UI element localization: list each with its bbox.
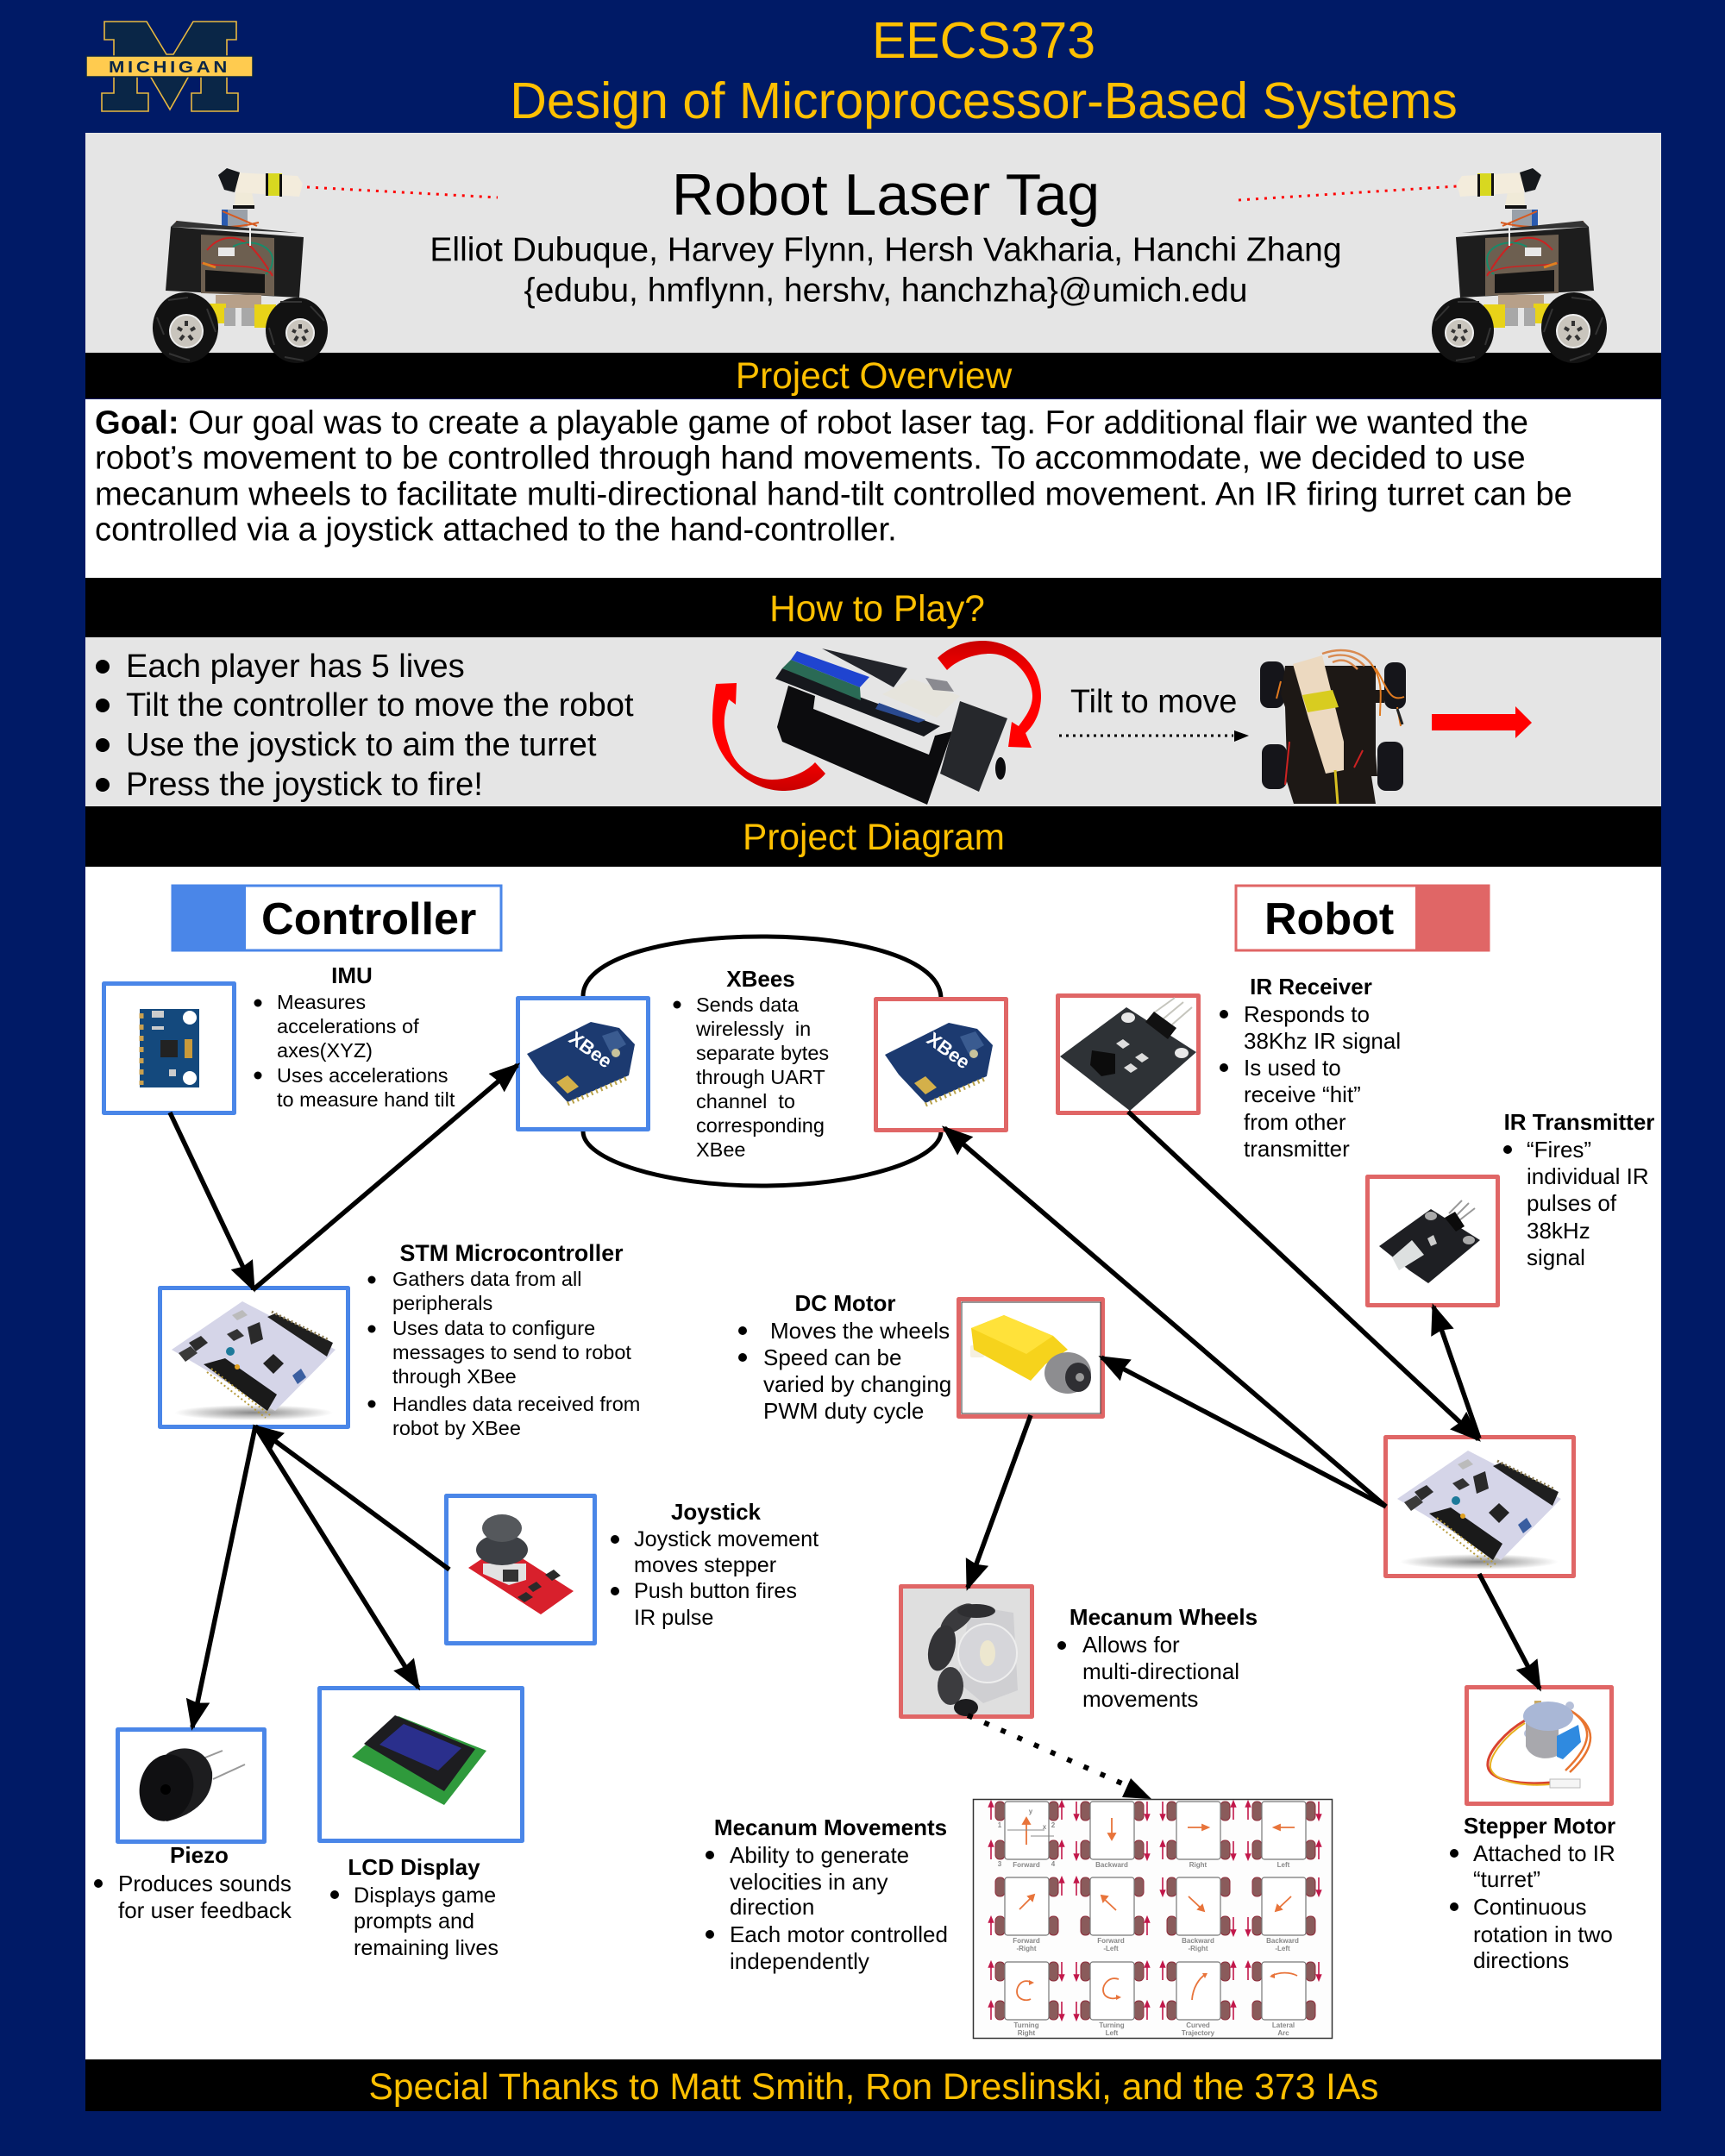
text: mecanum movements: Mecanum Movements <box>714 1814 947 1840</box>
box: mecanum wheel <box>900 1587 1032 1716</box>
cell: right <box>1161 1802 1235 1869</box>
text: IMU: axes(XYZ) <box>277 1039 373 1062</box>
text: IR receiver: 38Khz IR signal <box>1244 1028 1401 1054</box>
icon: left robot with laser <box>153 168 498 363</box>
bar: how to play <box>85 578 1661 637</box>
box: IR transmitter <box>1368 1176 1497 1306</box>
text: mecanum wheels: Allows for <box>1082 1632 1180 1658</box>
cell: left <box>1245 1802 1321 1869</box>
text: IR receiver: Responds to <box>1244 1001 1370 1027</box>
arrow: DC motor to mecanum wheel <box>968 1415 1031 1588</box>
text: XBees: corresponding <box>696 1114 825 1137</box>
panel: goal text <box>85 399 1661 578</box>
arrow: robot STM to IR transmitter <box>1433 1307 1479 1438</box>
cell: turning right: Turning <box>1013 2021 1039 2029</box>
arrow: robot STM to XBee <box>944 1128 1386 1507</box>
text: IMU: IMU <box>331 962 373 988</box>
list: game rules: Tilt the controller to move the robot <box>126 686 634 724</box>
text: STM microcontroller: peripherals <box>392 1292 492 1314</box>
panel: goal text: controlled via a joystick attached to the hand-controller. <box>95 511 897 548</box>
cell: forward left: Forward <box>1097 1937 1125 1945</box>
cell: turning right: Right <box>1018 2029 1036 2037</box>
arrow: IR receiver to robot STM <box>1128 1112 1478 1439</box>
text: XBees <box>673 966 829 1161</box>
cell: turning right <box>988 1962 1064 2037</box>
text: IMU: Uses accelerations <box>277 1064 448 1087</box>
bar: special thanks: Special Thanks to Matt Smith, Ron Dreslinski, and the 373 IAs <box>369 2067 1378 2108</box>
arrow: STM to XBee <box>254 1065 518 1289</box>
text: mecanum movements: independently <box>730 1948 869 1974</box>
box: right XBee <box>876 999 1006 1130</box>
cell: forward right: Forward <box>1013 1937 1040 1945</box>
icon: robot top view <box>1260 650 1406 804</box>
text: XBees: Sends data <box>696 993 800 1016</box>
text: IR transmitter: pulses of <box>1527 1190 1617 1216</box>
cell: forward: 3 <box>998 1860 1002 1868</box>
text: XBees: separate bytes <box>696 1042 829 1064</box>
bar: project diagram: Project Diagram <box>743 817 1005 857</box>
text: mecanum wheels: multi-directional <box>1082 1658 1239 1684</box>
label: robot <box>1236 885 1490 950</box>
cell: lateral arc: Arc <box>1277 2029 1289 2037</box>
box: LCD display <box>319 1689 523 1840</box>
cell: forward right <box>988 1877 1064 1952</box>
cell: backward left <box>1245 1877 1321 1952</box>
text: DC motor <box>738 1290 951 1424</box>
text: IR receiver <box>1220 974 1401 1162</box>
cell: backward left: Backward <box>1266 1937 1299 1945</box>
cell: right: Right <box>1189 1861 1208 1869</box>
text: stepper motor: Attached to IR <box>1473 1840 1615 1866</box>
arrow: dotted wheel to movement table <box>968 1715 1151 1799</box>
cell: forward: Forward <box>1013 1861 1040 1869</box>
box: left STM microcontroller <box>160 1288 348 1426</box>
box: left XBee <box>518 999 649 1130</box>
cell: backward right: -Right <box>1188 1945 1208 1952</box>
text: STM microcontroller: Gathers data from all <box>392 1268 581 1290</box>
cell: turning left <box>1075 1962 1149 2037</box>
link: xbee wireless ellipse <box>583 937 941 1186</box>
text: STM microcontroller: messages to send to robot <box>392 1341 631 1363</box>
cell: lateral arc: Lateral <box>1272 2021 1295 2029</box>
arrow: robot STM to stepper <box>1479 1574 1540 1689</box>
cell: forward <box>988 1802 1064 1869</box>
text: IR receiver: IR Receiver <box>1250 974 1372 1000</box>
text: stepper motor: rotation in two <box>1473 1921 1613 1947</box>
text: mecanum movements: Ability to generate <box>730 1842 909 1868</box>
cell: backward: Backward <box>1095 1861 1128 1869</box>
title: course name <box>510 12 1458 129</box>
text: LCD display <box>330 1854 499 1960</box>
cell: forward left <box>1075 1877 1149 1952</box>
text: stepper motor: Stepper Motor <box>1464 1813 1615 1839</box>
label: robot: Robot <box>1264 894 1394 944</box>
text: IR receiver: from other <box>1244 1109 1346 1135</box>
text: joystick: moves stepper <box>634 1553 776 1577</box>
box: DC motor <box>959 1299 1102 1416</box>
text: DC motor: varied by changing <box>763 1371 951 1397</box>
cell: forward: x <box>1043 1823 1047 1831</box>
text: STM microcontroller: through XBee <box>392 1365 517 1388</box>
text: DC motor: PWM duty cycle <box>763 1398 924 1424</box>
cell: turning left: Left <box>1106 2029 1119 2037</box>
box: joystick <box>447 1495 595 1644</box>
title: course name: EECS373 <box>872 12 1095 69</box>
text: LCD display: LCD Display <box>348 1854 480 1880</box>
cell: forward: 2 <box>1051 1821 1056 1829</box>
icon: hand controller with tilt arrows <box>712 641 1041 805</box>
cell: backward <box>1075 1802 1149 1869</box>
box: IMU <box>104 983 235 1112</box>
list: game rules: Each player has 5 lives <box>126 648 465 685</box>
text: joystick: IR pulse <box>634 1606 713 1630</box>
text: LCD display: Displays game <box>354 1883 496 1908</box>
list: game rules: Press the joystick to fire! <box>126 766 483 803</box>
icon: red direction arrow <box>1432 706 1532 738</box>
cell: forward right: -Right <box>1016 1945 1037 1952</box>
text: mecanum wheels: Mecanum Wheels <box>1070 1604 1258 1630</box>
cell: curved trajectory: Trajectory <box>1182 2029 1215 2037</box>
text: stepper motor: directions <box>1473 1947 1569 1973</box>
box: piezo <box>117 1730 264 1842</box>
authors: {edubu, hmflynn, hershv, hanchzha}@umich.edu <box>524 273 1247 309</box>
chart: mecanum movement table <box>973 1799 1332 2039</box>
cell: turning left: Turning <box>1099 2021 1125 2029</box>
cell: left: Left <box>1277 1861 1290 1869</box>
text: IR receiver: Is used to <box>1244 1055 1341 1081</box>
text: XBees: XBees <box>726 966 795 992</box>
label: controller <box>172 886 501 950</box>
text: piezo <box>94 1842 292 1923</box>
text: stepper motor: Continuous <box>1473 1894 1587 1920</box>
text: IR transmitter: individual IR <box>1527 1163 1649 1189</box>
box: robot STM microcontroller <box>1385 1437 1573 1576</box>
box: IR receiver <box>1057 995 1199 1112</box>
text: STM microcontroller <box>367 1240 640 1439</box>
text: mecanum movements: velocities in any <box>730 1869 888 1895</box>
text: IR receiver: transmitter <box>1244 1136 1350 1162</box>
cell: curved trajectory: Curved <box>1186 2021 1210 2029</box>
text: IR transmitter: “Fires” <box>1527 1137 1591 1163</box>
logo: Michigan block M: MICHIGAN <box>109 59 230 76</box>
label: controller: Controller <box>261 894 476 944</box>
list: game rules: Use the joystick to aim the turret <box>126 726 597 763</box>
panel: goal text: robot’s movement to be controlled through hand movements. To accommodate, we decided to use <box>95 440 1526 476</box>
arrow: joystick to STM <box>255 1426 449 1570</box>
text: joystick: Joystick <box>671 1499 762 1525</box>
text: DC motor: Moves the wheels <box>770 1318 950 1344</box>
text: XBees: channel to <box>696 1090 795 1112</box>
box: stepper motor <box>1466 1687 1611 1804</box>
bar: how to play: How to Play? <box>769 588 985 629</box>
text: mecanum movements <box>706 1814 948 1974</box>
cell: forward: 4 <box>1051 1860 1056 1868</box>
text: piezo: Piezo <box>170 1842 229 1868</box>
icon: right robot with laser <box>1239 168 1607 363</box>
panel: how to play background <box>85 637 1661 806</box>
text: joystick <box>611 1499 819 1630</box>
text: IR transmitter: 38kHz <box>1527 1218 1590 1244</box>
text: STM microcontroller: STM Microcontroller <box>399 1240 624 1266</box>
text: joystick: Push button fires <box>634 1579 797 1603</box>
text: mecanum wheels <box>1057 1604 1258 1712</box>
text: LCD display: prompts and <box>354 1909 474 1934</box>
text: IR transmitter <box>1503 1109 1654 1270</box>
text: IR receiver: receive “hit” <box>1244 1081 1361 1107</box>
text: STM microcontroller: robot by XBee <box>392 1417 521 1439</box>
arrow: IMU to STM <box>170 1112 254 1289</box>
panel: project header <box>85 133 1661 353</box>
text: IR transmitter: IR Transmitter <box>1504 1109 1654 1135</box>
cell: forward left: -Left <box>1103 1945 1119 1952</box>
cell: forward: y <box>1029 1808 1033 1815</box>
arrow: STM to piezo <box>192 1426 255 1727</box>
text: piezo: for user feedback <box>118 1897 292 1923</box>
text: IMU: accelerations of <box>277 1015 419 1037</box>
cell: backward right <box>1161 1877 1235 1952</box>
bar: project overview: Project Overview <box>736 355 1013 396</box>
cell: lateral arc <box>1245 1962 1321 2037</box>
text: IR transmitter: signal <box>1527 1244 1585 1270</box>
bar: special thanks <box>85 2059 1661 2111</box>
cell: curved trajectory <box>1161 1962 1235 2037</box>
text: LCD display: remaining lives <box>354 1936 499 1960</box>
text: mecanum movements: Each motor controlled <box>730 1921 948 1947</box>
panel: diagram background <box>85 867 1661 2059</box>
authors: Elliot Dubuque, Harvey Flynn, Hersh Vakharia, Hanchi Zhang <box>430 231 1342 269</box>
authors <box>430 231 1342 309</box>
text: IMU: Measures <box>277 991 366 1013</box>
text: IMU <box>254 962 455 1111</box>
logo: Michigan block M <box>86 22 253 111</box>
text: XBees: XBee <box>696 1138 745 1161</box>
label: tilt to move with dotted arrow <box>1059 683 1249 742</box>
text: stepper motor <box>1450 1813 1615 1973</box>
text: mecanum movements: direction <box>730 1894 814 1920</box>
cell: backward left: -Left <box>1275 1945 1290 1952</box>
label: tilt to move with dotted arrow: Tilt to move <box>1070 683 1237 719</box>
cell: backward right: Backward <box>1182 1937 1214 1945</box>
heading: project title: Robot Laser Tag <box>672 163 1100 228</box>
text: DC motor: DC Motor <box>795 1290 895 1316</box>
arrow: robot STM to DC motor <box>1101 1357 1386 1507</box>
text: piezo: Produces sounds <box>118 1871 292 1896</box>
text: mecanum wheels: movements <box>1082 1686 1198 1712</box>
panel: goal text: mecanum wheels to facilitate multi-directional hand-tilt controlled movement. An IR firing turret can be <box>95 476 1572 512</box>
text: XBees: through UART <box>696 1066 825 1088</box>
arrow: STM to LCD <box>255 1426 418 1688</box>
text: STM microcontroller: Uses data to configure <box>392 1317 595 1339</box>
list: game rules <box>96 648 634 803</box>
cell: forward: 1 <box>998 1821 1002 1829</box>
title: course name: Design of Microprocessor-Based Systems <box>510 72 1458 129</box>
text: IMU: to measure hand tilt <box>277 1088 455 1111</box>
text: stepper motor: “turret” <box>1473 1866 1540 1892</box>
panel: goal text: Goal: Our goal was to create a playable game of robot laser tag. For additional flair we wanted the <box>95 404 1528 442</box>
text: joystick: Joystick movement <box>634 1527 819 1551</box>
bar: project diagram <box>85 806 1661 867</box>
text: XBees: wirelessly in <box>695 1018 811 1040</box>
text: STM microcontroller: Handles data received from <box>392 1393 640 1415</box>
bar: project overview <box>85 353 1661 398</box>
text: DC motor: Speed can be <box>763 1344 901 1370</box>
